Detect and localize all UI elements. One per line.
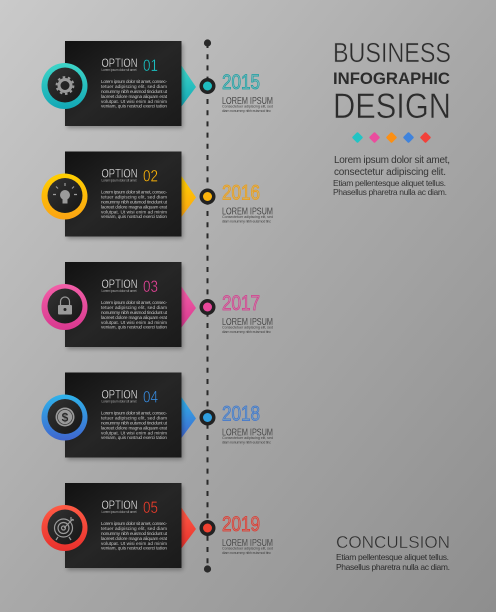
option text: Lorem ipsum dolor sit amet, consec-	[101, 190, 167, 194]
card panel	[65, 41, 183, 128]
card panel	[65, 152, 183, 238]
option text	[101, 410, 168, 440]
step 2: option 02 / 2016	[42, 152, 273, 238]
option heading: 01	[143, 56, 158, 75]
option text: tetuer adipiscing elit, sed diam	[101, 84, 167, 89]
title: INFOGRAPHIC	[333, 69, 450, 88]
card arrow	[181, 507, 196, 549]
conclusion: CONCULSION	[336, 532, 450, 552]
option text: Lorem ipsum dolor sit amet, consec-	[101, 410, 167, 416]
lorem ipsum block: Consectetuer adipiscing elit, sed	[222, 326, 273, 330]
lorem ipsum block	[222, 428, 273, 444]
icon: padlock badge	[42, 284, 88, 330]
timeline axis	[204, 39, 211, 573]
intro text: Etiam pellentesque aliquet tellus.	[333, 178, 446, 188]
title: DESIGN	[333, 87, 451, 126]
option text: tetuer adipiscing elit, sed diam	[101, 416, 167, 420]
lorem ipsum block: diam nonummy nibh euismod tinc	[222, 440, 271, 444]
lorem ipsum block	[222, 96, 273, 113]
intro text	[333, 155, 450, 197]
colour diamonds	[352, 132, 431, 143]
lorem ipsum block: Consectetuer adipiscing elit, sed	[222, 104, 273, 108]
option text: nonummy nibh euismod tincidunt ut	[101, 420, 168, 426]
lorem ipsum block: LOREM IPSUM	[222, 428, 273, 438]
option text: volutpat. Ut wisi enim ad minim	[101, 320, 167, 325]
option text	[101, 521, 168, 551]
option text: laoreet dolore magna aliquam erat	[101, 536, 168, 541]
icon: dollar coin badge: $	[62, 410, 69, 424]
option text	[101, 300, 168, 330]
option heading: Lorem ipsum dolor sit amet	[102, 68, 137, 72]
step 5: option 05 / 2019	[42, 483, 273, 570]
card arrow	[181, 286, 196, 328]
lorem ipsum block	[222, 206, 273, 224]
lorem ipsum block: LOREM IPSUM	[222, 206, 273, 218]
option heading: Lorem ipsum dolor sit amet	[102, 510, 137, 514]
icon: target badge	[42, 505, 88, 551]
icon: gear badge	[42, 63, 88, 109]
conclusion: Etiam pellentesque aliquet tellus.	[336, 552, 449, 562]
timeline node	[200, 520, 216, 536]
option heading	[102, 166, 158, 186]
option text: laoreet dolore magna aliquam erat	[101, 94, 168, 99]
option text: nonummy nibh euismod tincidunt ut	[101, 310, 168, 315]
option text	[101, 190, 168, 219]
card arrow	[181, 176, 196, 218]
card panel	[65, 372, 183, 460]
option text: Lorem ipsum dolor sit amet, consec-	[101, 79, 167, 84]
lorem ipsum block: LOREM IPSUM	[222, 317, 273, 328]
year label: 2016	[222, 182, 260, 204]
option heading	[102, 277, 158, 296]
timeline node	[200, 299, 216, 315]
timeline node	[200, 410, 216, 426]
option text: veniam, quis nostrud exerci tation	[101, 325, 167, 330]
card arrow	[181, 65, 196, 107]
year label: 2015	[222, 71, 260, 94]
intro text: Lorem ipsum dolor sit amet,	[334, 155, 450, 166]
option text: volutpat. Ut wisi enim ad minim	[101, 541, 167, 546]
step 1: option 01 / 2015	[42, 41, 273, 128]
option text: volutpat. Ut wisi enim ad minim	[101, 99, 167, 104]
option heading: OPTION	[102, 500, 138, 512]
option text: veniam, quis nostrud exerci tation	[101, 214, 167, 219]
year label: 2019	[222, 513, 260, 536]
option heading	[102, 498, 158, 517]
option text: tetuer adipiscing elit, sed diam	[101, 526, 167, 531]
option text: nonummy nibh euismod tincidunt ut	[101, 89, 168, 94]
year label: 2017	[222, 292, 260, 315]
option text: nonummy nibh euismod tincidunt ut	[101, 531, 168, 536]
option text: tetuer adipiscing elit, sed diam	[101, 305, 167, 310]
step 3: option 03 / 2017	[42, 262, 273, 349]
option heading: OPTION	[102, 168, 138, 180]
intro text: Phasellus pharetra nulla ac diam.	[333, 187, 447, 197]
option text: laoreet dolore magna aliquam erat	[101, 425, 168, 430]
intro text: consectetur adipiscing elit.	[334, 167, 446, 178]
option text: veniam, quis nostrud exerci tation	[101, 546, 167, 551]
option text: laoreet dolore magna aliquam erat	[101, 315, 168, 320]
option text: tetuer adipiscing elit, sed diam	[101, 194, 167, 200]
lorem ipsum block: LOREM IPSUM	[222, 538, 273, 549]
option heading: 02	[143, 166, 158, 186]
step 4: option 04 / 2018	[42, 372, 273, 460]
lorem ipsum block: diam nonummy nibh euismod tinc	[222, 330, 271, 334]
timeline node	[200, 78, 216, 94]
card panel	[65, 483, 183, 570]
icon: dollar coin badge	[42, 394, 88, 440]
title	[333, 37, 451, 126]
lorem ipsum block: diam nonummy nibh euismod tinc	[222, 220, 271, 224]
option heading	[102, 388, 158, 406]
timeline node	[200, 188, 216, 204]
option text: veniam, quis nostrud exerci tation	[101, 104, 167, 109]
option heading: 05	[143, 498, 158, 517]
option text: nonummy nibh euismod tincidunt ut	[101, 200, 168, 204]
option text: Lorem ipsum dolor sit amet, consec-	[101, 521, 167, 526]
icon: light bulb badge	[42, 174, 88, 220]
lorem ipsum block: LOREM IPSUM	[222, 96, 273, 107]
conclusion: Phasellus pharetra nulla ac diam.	[336, 562, 450, 572]
option heading: Lorem ipsum dolor sit amet	[102, 289, 137, 293]
option text: laoreet dolore magna aliquam erat	[101, 204, 168, 209]
option heading: 04	[143, 388, 158, 406]
card panel	[65, 262, 183, 349]
option heading	[102, 56, 158, 75]
option text: volutpat. Ut wisi enim ad minim	[101, 430, 167, 435]
lorem ipsum block	[222, 317, 273, 334]
option text: veniam, quis nostrud exerci tation	[101, 435, 167, 440]
lorem ipsum block: diam nonummy nibh euismod tinc	[222, 109, 271, 113]
lorem ipsum block	[222, 538, 273, 555]
option heading: OPTION	[102, 279, 138, 291]
option text: volutpat. Ut wisi enim ad minim	[101, 209, 167, 214]
year label: 2018	[222, 402, 260, 426]
lorem ipsum block: Consectetuer adipiscing elit, sed	[222, 215, 273, 219]
option heading: Lorem ipsum dolor sit amet	[102, 400, 137, 404]
option heading: Lorem ipsum dolor sit amet	[102, 178, 137, 182]
option heading: OPTION	[102, 58, 138, 70]
option heading: OPTION	[102, 390, 138, 402]
lorem ipsum block: diam nonummy nibh euismod tinc	[222, 551, 271, 555]
title: BUSINESS	[333, 37, 451, 68]
option text	[101, 79, 168, 109]
conclusion	[336, 532, 450, 572]
lorem ipsum block: Consectetuer adipiscing elit, sed	[222, 436, 273, 440]
lorem ipsum block: Consectetuer adipiscing elit, sed	[222, 546, 273, 550]
option text: Lorem ipsum dolor sit amet, consec-	[101, 300, 167, 305]
option heading: 03	[143, 277, 158, 296]
card arrow	[181, 396, 196, 438]
